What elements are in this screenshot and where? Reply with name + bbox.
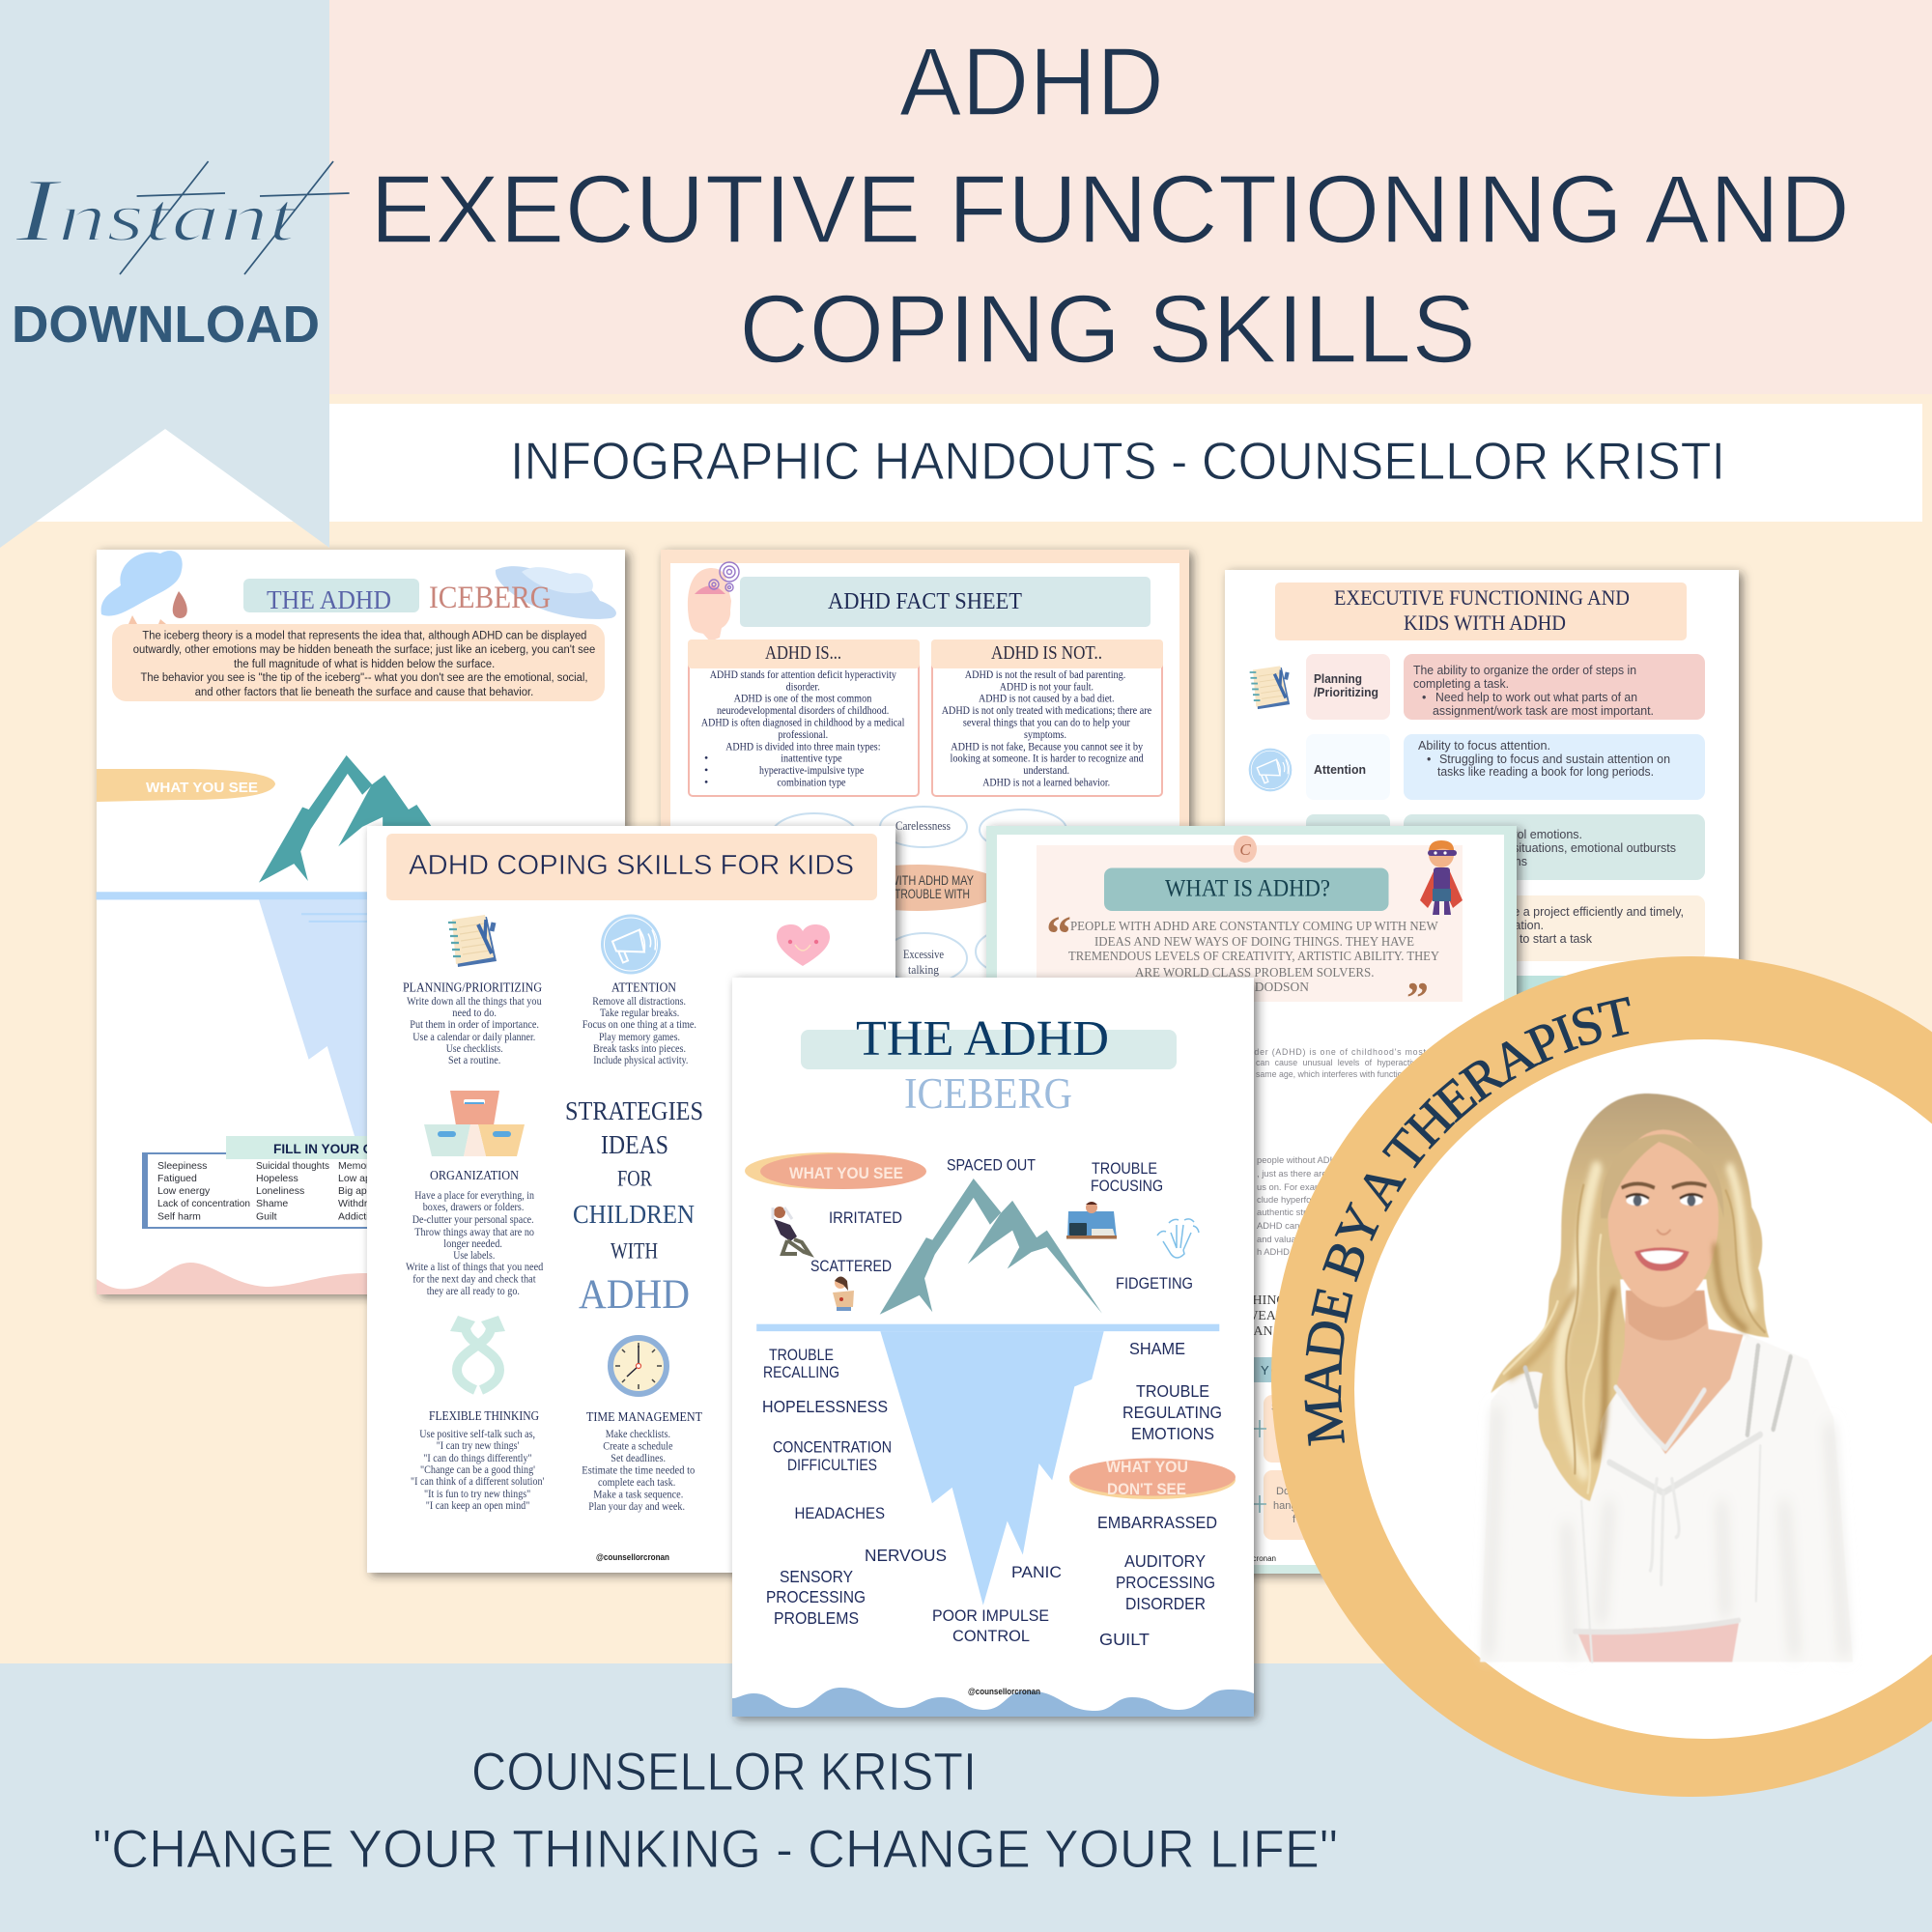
text box: iceberg theory: The behavior you see is "the tip of the iceberg"-- what you don't see are the emotional, social, [141,672,587,684]
body text: us on. For example [1257,1181,1334,1192]
section: flexible thinking: "It is fun to try new things" [424,1489,530,1500]
icon: clock [611,1338,667,1394]
section: attention: Play memory games. [599,1032,680,1043]
panel: ADHD is not: ADHD is not fake, Because you cannot see it by [951,739,1143,753]
hair top [1601,1134,1723,1218]
body text: order (ADHD) is one of childhood's most [1245,1047,1427,1057]
title: EXECUTIVE FUNCTIONING AND [370,156,1850,264]
labels above the water: SCATTERED [810,1258,892,1275]
illustration: teal iceberg [97,755,577,1181]
row: attention: tasks like reading a book for long periods. [1437,765,1654,779]
blouse details [1525,1346,1791,1662]
labels below the water: right: DISORDER [1125,1594,1206,1613]
row: emotional control [1306,814,1705,880]
body text: can cause unusual levels of hyperactivity [1256,1058,1425,1067]
table: fill in your own: Loneliness [256,1185,304,1197]
quote text: TREMENDOUS LEVELS OF CREATIVITY, ARTISTIC ABILITY. THEY [1068,949,1439,963]
section: time management: Estimate the time needed to [582,1464,696,1476]
row: time management [1404,895,1705,961]
section: flexible thinking: "I can try new things' [437,1440,519,1452]
document: ADHD coping skills for kids [367,826,895,1573]
table: fill in your own: Fatigued [157,1173,197,1184]
strategies ideas heading: ADHD [579,1272,690,1318]
neck and chest [1617,1291,1743,1454]
section: time management: Make checklists. [606,1429,670,1440]
text box: iceberg theory [112,624,605,701]
neck shadow [1626,1291,1706,1341]
footer text: COUNSELLOR KRISTI [471,1741,977,1802]
table: fill in your own: Big appetite [338,1185,392,1197]
logo [1234,836,1257,863]
diagram: trouble bubbles: CHILDREN WITH ADHD MAY [832,873,974,888]
heading: executive functioning [1275,582,1687,640]
document: executive functioning and kids with ADHD [1225,570,1739,1315]
diagram: trouble bubbles [772,807,1066,983]
panel: ADHD is: hyperactive-impulsive type [759,763,864,777]
body text: , just as there are certain [1257,1168,1356,1179]
row: attention: Struggling to focus and sustain attention on [1439,753,1670,766]
body text: clude hyperfocus [1257,1194,1325,1205]
icon: right cloud [496,566,616,619]
hair back [1491,1094,1769,1501]
heading: coping skills [386,834,877,900]
labels below the water: left: NERVOUS [865,1546,947,1565]
labels below the water: left: PROCESSING [766,1587,866,1606]
row: emotional control: Overreacting to situations, emotional outbursts [1427,841,1676,855]
row: time management: Ability to complete a project efficiently and timely, [1422,905,1684,919]
diagram: trouble bubbles: talking [908,962,939,977]
text box: iceberg theory: The iceberg theory is a model that represents the idea that, although ADHD can be displayed [142,630,586,641]
panel: ADHD is not: understand. [1023,763,1069,777]
script text: instant: Instant [14,160,298,261]
row: planning: Planning [1314,672,1362,686]
section: planning: PLANNING/PRIORITIZING [403,981,542,995]
diagram: trouble bubbles: HAVE TROUBLE WITH [866,887,970,901]
section: time management: Plan your day and week. [588,1501,685,1513]
labels below the water: left: DIFFICULTIES [787,1457,877,1474]
panel: ADHD is not: looking at someone. It is harder to recognize and [951,752,1144,765]
labels below the water: left: TROUBLE [769,1347,834,1364]
row: time management: Struggling to start a task [1462,932,1593,946]
row: planning [1306,654,1705,720]
section: planning: need to do. [452,1008,497,1019]
body text: and valuable [1257,1234,1308,1244]
panel: ADHD is not: ADHD is not the result of bad parenting. [965,668,1125,681]
quote marks [1046,907,1429,1022]
skirt [1577,1623,1739,1662]
panel: ADHD is: ADHD IS... [765,642,841,664]
labels below the water: left: HEADACHES [794,1505,885,1522]
section: time management [582,1410,702,1513]
footer panel: blue [0,1663,1932,1932]
section: organization: longer needed. [443,1238,502,1250]
section: flexible thinking: FLEXIBLE THINKING [429,1409,539,1424]
section: organization: Throw things away that are no [414,1227,534,1238]
section: organization: they are all ready to go. [427,1286,520,1297]
text box: iceberg theory: and other factors that lie beneath the surface and cause that behavior. [195,687,533,698]
blue wave [732,1688,1254,1717]
labels below the water: left: SENSORY [780,1567,853,1586]
labels below the water: right: EMBARRASSED [1097,1513,1217,1532]
footer text: "CHANGE YOUR THINKING - CHANGE YOUR LIFE" [93,1818,1338,1879]
title: ADHD [899,28,1164,136]
labels below the water: right: AUDITORY [1124,1551,1206,1571]
quote panel [1037,836,1463,1022]
icons: stressed people [773,1202,1199,1311]
title: COPING SKILLS [739,275,1476,384]
section: organization: ORGANIZATION [430,1169,519,1183]
panel: ADHD is: combination type [777,776,846,789]
heading: executive functioning: EXECUTIVE FUNCTIONING AND [1334,585,1630,610]
subheading fragment: WEAK [1245,1309,1286,1323]
labels below the water: centre: POOR IMPULSE [932,1606,1049,1625]
row: planning: completing a task. [1413,677,1509,691]
subheading fragment: THING [1244,1293,1287,1308]
section: organization: boxes, drawers or folders. [423,1202,525,1213]
labels below the water: right [1097,1339,1222,1649]
illustration: iceberg [756,1179,1219,1605]
labels below the water: centre: PANIC [1011,1563,1062,1581]
header panel: pink [329,0,1932,394]
iceberg peak [880,1179,1102,1315]
panel: ADHD is not: ADHD is not caused by a bad diet. [979,692,1115,705]
labels below the water: left: HOPELESSNESS [762,1397,888,1416]
section: attention: Break tasks into pieces. [593,1043,686,1055]
quote text: PEOPLE WITH ADHD ARE CONSTANTLY COMING UP WITH NEW [1070,919,1438,933]
footer text [93,1741,1338,1879]
eyes and brows [1622,1183,1706,1207]
heading: the ADHD [243,579,419,614]
labels below the water: right: PROCESSING [1116,1573,1215,1592]
panel: ADHD is not: ADHD is not only treated with medications; there are [942,703,1151,717]
subheading fragment [1244,1293,1287,1339]
body text: people without ADHD [1257,1154,1343,1165]
heading: iceberg: ICEBERG [429,581,551,615]
quote text: ARE WORLD CLASS PROBLEM SOLVERS. [1135,965,1374,980]
strategies ideas heading [565,1096,703,1318]
labels above the water: FOCUSING [1091,1178,1163,1195]
iceberg below water [880,1331,1104,1605]
band and tips: f [1293,1514,1296,1525]
table: fill in your own: Low energy [157,1185,211,1197]
labels below the water: centre: CONTROL [952,1627,1030,1645]
table: fill in your own: Suicidal thoughts [256,1160,329,1172]
section: organization: De-clutter your personal space. [412,1214,534,1226]
icon: blue rain cloud [101,551,187,624]
band and tips: YOU [1261,1363,1293,1378]
panel: ADHD is: ADHD stands for attention deficit hyperactivity [710,668,896,681]
subtitle band: white [0,404,1922,522]
section: planning: Use a calendar or daily planner. [412,1032,535,1043]
band and tips: S [1271,1402,1278,1413]
panel: ADHD is: ADHD is divided into three main types: [725,739,881,753]
diagram: trouble bubbles: Excessive [903,947,944,961]
section: flexible thinking: "I can keep an open mind" [426,1500,529,1512]
strategies ideas heading: FOR [617,1167,653,1190]
table: fill in your own: Shame [256,1198,288,1209]
panel: ADHD is not [931,639,1163,796]
badge: what you don't see: WHAT YOU [1106,1458,1188,1476]
row: planning: The ability to organize the order of steps in [1413,664,1636,677]
row: planning: assignment/work task are most important. [1433,704,1654,718]
panel: ADHD is: professional. [779,727,828,741]
subheading fragment: CAN [1244,1324,1273,1339]
ribbon: instant download [0,0,350,548]
section: planning: Use checklists. [446,1043,503,1055]
section: flexible thinking: "I can do things differently" [423,1453,532,1464]
panel: ADHD is not: several things that you can do to help your [963,715,1130,728]
section: time management: Create a schedule [603,1441,673,1453]
heading: the ADHD: THE ADHD [267,585,391,614]
table: fill in your own: Addiction [338,1211,380,1223]
table: fill in your own: Self harm [157,1211,201,1223]
section: attention [582,981,696,1066]
section: time management: complete each task. [598,1477,675,1489]
heading: what is ADHD: WHAT IS ADHD? [1165,875,1330,902]
row: flexible thinking [1404,976,1705,1041]
handle: @counsellorcronan [596,1552,669,1562]
row: time management: time and organisation. [1425,919,1544,932]
body text: h ADHD. [1257,1246,1292,1257]
section: time management: Make a task sequence. [593,1490,683,1501]
strategies ideas heading: CHILDREN [573,1200,695,1229]
script text: instant [14,160,350,274]
labels above the water: FIDGETING [1116,1275,1193,1293]
labels below the water: left: PROBLEMS [774,1608,859,1628]
quote marks: ” [1406,973,1429,1022]
quote marks: “ [1046,907,1071,962]
illustration: superhero kid [1420,840,1463,915]
icon: megaphone [1249,749,1292,791]
row: planning: • [1422,691,1426,704]
heading: ADHD fact sheet: ADHD FACT SHEET [828,589,1022,614]
badge: what you see: WHAT YOU SEE [789,1164,903,1182]
blouse shading [1489,1406,1844,1657]
row: planning: Need help to work out what parts of an [1435,691,1637,704]
section: time management: TIME MANAGEMENT [586,1410,702,1425]
panel: ADHD is: ADHD is often diagnosed in childhood by a medical [701,715,905,728]
badge: what you see: WHAT YOU SEE [146,780,258,796]
labels below the water: left: CONCENTRATION [773,1439,892,1457]
labels below the water: right: GUILT [1099,1630,1150,1649]
section: attention: Take regular breaks. [600,1008,679,1019]
panel: ADHD is not: ADHD IS NOT.. [991,642,1102,664]
section: organization: Use labels. [453,1250,495,1262]
panel: ADHD is: • [704,763,708,777]
quote text: IDEAS AND NEW WAYS OF DOING THINGS. THEY HAVE [1094,934,1414,949]
panel: ADHD is not: symptoms. [1024,727,1066,741]
section: organization: Have a place for everything, in [414,1190,534,1202]
quote text [1068,919,1439,994]
row: emotional control: Ability to control emotions. [1441,828,1582,841]
strategies ideas heading: STRATEGIES [565,1096,703,1125]
section: flexible thinking [411,1409,544,1512]
section: flexible thinking: "I can think of a different solution' [411,1476,544,1488]
subtitle: INFOGRAPHIC HANDOUTS - COUNSELLOR KRISTI [510,431,1725,491]
band and tips: Do [1276,1486,1290,1497]
hair waves [1504,1185,1765,1492]
band and tips: @counsellorcronan [1209,1554,1276,1563]
section: attention: ATTENTION [611,981,676,995]
icon: flexible arrows [450,1316,505,1390]
face [1608,1129,1719,1307]
section: time management: Set deadlines. [611,1453,666,1464]
band and tips: hang [1273,1500,1296,1512]
labels below the water: right: REGULATING [1122,1403,1222,1422]
panel: ADHD is [688,639,920,796]
labels below the water: right: SHAME [1129,1339,1185,1358]
document: ADHD fact sheet [661,550,1189,1294]
section: planning: Put them in order of importance. [410,1019,539,1031]
diagram: trouble bubbles: Carelessness [895,818,951,833]
labels below the water: left [762,1347,947,1628]
table: fill in your own: Guilt [256,1211,277,1223]
panel: ADHD is: inattentive type [781,752,842,765]
hair highlights [1510,1169,1751,1473]
body text: authentic strengths [1257,1207,1334,1217]
badge: made by a therapist ring [1271,956,1932,1797]
section: organization: Write a list of things that you need [406,1262,544,1273]
table: fill in your own: Withdrawal [338,1198,388,1209]
handle: @counsellorcronan [968,1687,1040,1696]
heading: ADHD fact sheet [740,577,1151,627]
table: fill in your own: Sleepiness [157,1160,207,1172]
heading: what is ADHD [1104,867,1389,911]
strategies ideas heading: WITH [611,1238,658,1264]
photo: smiling therapist [1480,1094,1853,1662]
heading: coping skills: ADHD COPING SKILLS FOR KIDS [409,850,854,881]
heading: the ADHD iceberg: THE ADHD [856,1011,1109,1066]
row: emotional control: and poor decisions [1426,855,1527,868]
section: planning [403,981,542,1066]
section: flexible thinking: Use positive self-talk such as, [419,1429,535,1440]
icon: storage bins [424,1091,525,1156]
panel: ADHD is not: ADHD is not your fault. [1000,679,1094,693]
icon: megaphone [601,914,661,974]
panel: ADHD is not: ADHD is not a learned behavior. [982,776,1110,789]
labels below the water: right: TROUBLE [1136,1381,1209,1401]
curved text: MADE BY A THERAPIST [1304,997,1631,1446]
pink wave [97,1263,625,1294]
row: planning: /Prioritizing [1314,686,1378,699]
labels above the water [810,1157,1193,1293]
icon: notebook [1250,666,1290,709]
table: fill in your own: Low appetite [338,1173,396,1184]
section: organization [406,1169,544,1297]
quote text: - WILLIAM DODSON [1186,980,1309,994]
body text [1245,1047,1427,1257]
badge: what you don't see: DON'T SEE [1107,1480,1186,1498]
table: fill in your own: Hopeless [256,1173,298,1184]
band and tips [1209,1357,1379,1563]
text box: iceberg theory: outwardly, other emotions may be hidden beneath the surface; just like an iceberg, you can't see [133,644,595,656]
table: fill in your own: Lack of concentration [157,1198,250,1209]
document: what is ADHD [986,826,1517,1574]
row: attention: • [1427,753,1431,766]
row: attention [1306,734,1705,800]
nose and smile [1634,1230,1690,1271]
title [370,28,1850,384]
labels above the water: IRRITATED [829,1209,902,1227]
badge: what you don't see [1069,1458,1236,1499]
table: fill in your own: FILL IN YOUR OWN [273,1141,395,1156]
icon: head with spirals [688,562,739,641]
panel: ADHD is: • [704,752,708,765]
icon: smiling heart [777,924,830,966]
document: ADHD iceberg fill-in sheet [97,550,625,1294]
badge: what you see [97,769,275,802]
section: attention: Remove all distractions. [592,996,686,1008]
badge: what you see [745,1152,926,1189]
row: attention: Ability to focus attention. [1418,739,1550,753]
labels below the water: right: EMOTIONS [1131,1424,1214,1443]
section: organization: for the next day and check that [412,1273,536,1285]
label: download: DOWNLOAD [12,296,320,354]
section: flexible thinking: "Change can be a good thing' [420,1464,535,1476]
body text: same age, which interferes with functioning [1256,1069,1418,1079]
heading: executive functioning: KIDS WITH ADHD [1404,611,1566,635]
row: attention: Attention [1314,763,1366,777]
strategies ideas heading: IDEAS [601,1130,668,1159]
table: fill in your own: Memory [338,1160,376,1172]
panel: ADHD is: ADHD is one of the most common [734,692,871,705]
water line [756,1324,1219,1331]
text box: iceberg theory: the full magnitude of what is hidden below the surface. [234,659,495,670]
heading: the ADHD iceberg [801,1011,1177,1118]
table: fill in your own [142,1136,419,1229]
icon: notebook [448,915,497,967]
panel: ADHD is: • [704,776,708,789]
labels above the water: SPACED OUT [947,1157,1036,1175]
document: the ADHD iceberg [732,978,1254,1717]
section: planning: Set a routine. [448,1055,500,1066]
section: planning: Write down all the things that you [407,996,542,1008]
blouse [1480,1335,1853,1662]
labels above the water: TROUBLE [1092,1160,1157,1178]
section: attention: Include physical activity. [593,1055,688,1066]
labels below the water: centre [932,1563,1062,1645]
panel: ADHD is: neurodevelopmental disorders of childhood. [717,703,889,717]
section: attention: Focus on one thing at a time. [582,1019,696,1031]
labels below the water: left: RECALLING [763,1364,839,1381]
body text: ADHD can use [1257,1220,1317,1231]
heading: the ADHD iceberg: ICEBERG [904,1069,1072,1118]
logo: C [1239,840,1251,859]
panel: ADHD is: disorder. [786,679,820,693]
